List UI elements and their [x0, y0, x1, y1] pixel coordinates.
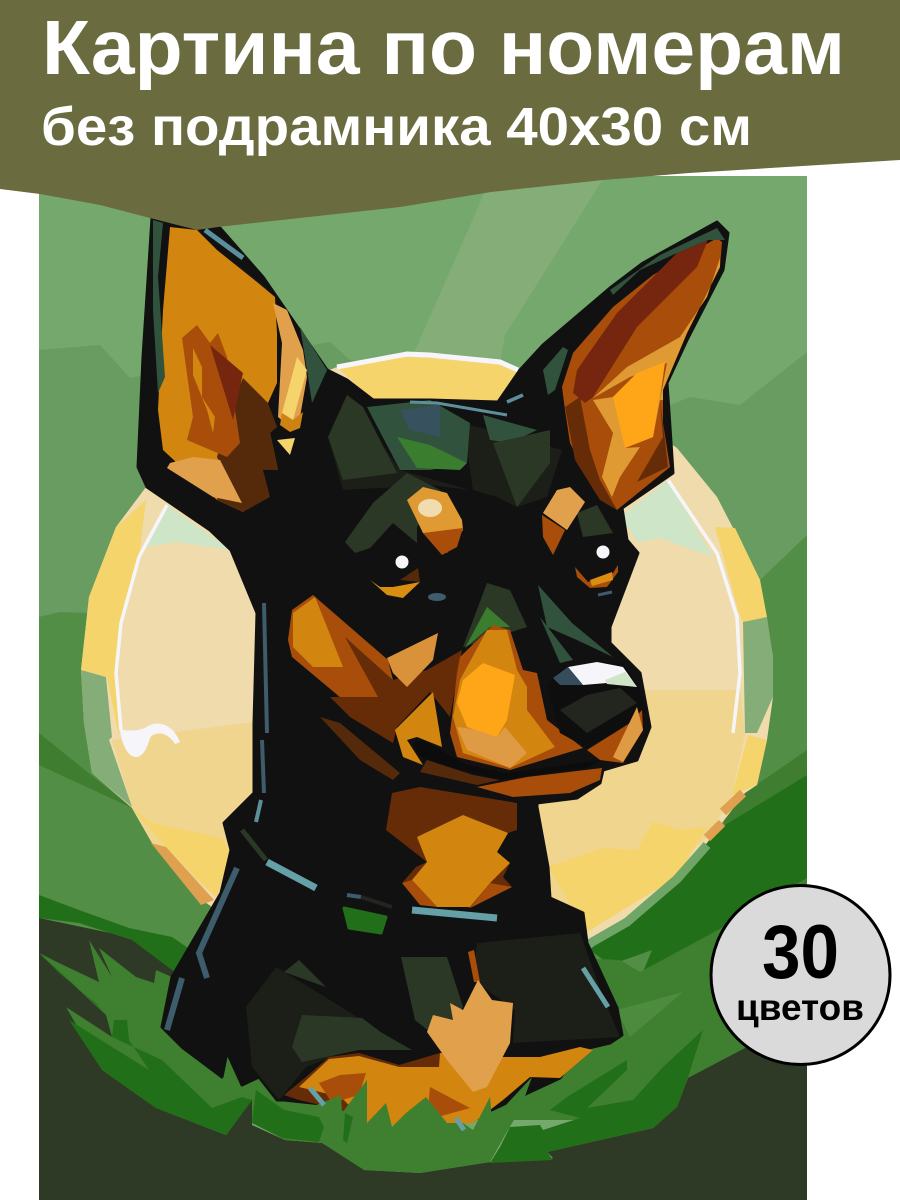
ground pocket upper left — [39, 918, 191, 985]
disc: right yellow ring — [715, 527, 767, 622]
disc: yellow top arc — [337, 357, 518, 402]
dog: collar — [242, 830, 497, 933]
light grass — [39, 878, 807, 1120]
disc: white hook blob — [120, 724, 180, 757]
badge: 30 colours: 30 — [762, 910, 839, 995]
title: Картина по номерам — [42, 5, 845, 91]
foreground: grass and dark ground — [39, 878, 807, 1200]
bottom ground — [39, 953, 807, 1200]
disc: right pale green block — [743, 617, 773, 733]
dog: nose — [547, 662, 647, 763]
header banner — [0, 0, 900, 230]
dark grass right — [490, 1030, 703, 1163]
dog: silhouette — [138, 218, 728, 1120]
subtitle: без подрамника 40х30 см — [41, 97, 752, 157]
disc: white ring top — [337, 354, 518, 370]
dark band upper left — [39, 895, 191, 973]
dog: chest leaf — [427, 950, 513, 1092]
dog: eyebrows — [407, 487, 585, 555]
dog: shoulder lines — [167, 868, 237, 1030]
dog: chest patch on neck — [386, 787, 517, 908]
disc: lower warm band — [112, 690, 745, 932]
disc: right yellow block — [732, 735, 767, 795]
disc: left yellow ring — [81, 500, 146, 737]
disc: lower left yellow — [132, 808, 231, 897]
dog: chest shading — [246, 933, 620, 1100]
dog: right eye — [575, 546, 618, 595]
disc: left pale green block — [81, 670, 132, 807]
disc: mint left — [146, 505, 231, 550]
dark grass streak — [39, 953, 102, 1010]
dog: chest orange — [284, 1047, 593, 1127]
grass over chest — [252, 1077, 532, 1173]
painting: green background — [39, 176, 807, 1200]
dog: mouth and lip — [413, 740, 602, 797]
disc: orange spots — [707, 793, 743, 838]
sun disc — [81, 353, 773, 960]
disc: green rim — [587, 845, 707, 945]
dog illustration — [138, 218, 728, 1173]
disc: white ring right — [668, 480, 740, 733]
dog: cheek — [288, 595, 462, 780]
disc: mint right — [620, 480, 713, 557]
disc: white ring left — [116, 505, 167, 730]
dog: forehead shading — [328, 395, 613, 553]
dog: nose bridge — [463, 583, 613, 663]
dog: muzzle — [450, 625, 583, 770]
dog: left eye — [370, 556, 446, 601]
light grass patch right — [617, 992, 683, 1037]
badge: 30 colours: цветов — [736, 987, 864, 1028]
dark grass left — [69, 1020, 252, 1135]
dog: right ear — [507, 228, 725, 510]
dog: neck lines — [256, 603, 267, 822]
dog: left ear — [153, 220, 327, 512]
disc: lower right yellow — [548, 822, 707, 932]
badge: 30 colours — [711, 886, 890, 1064]
disc: lower left orange — [151, 843, 214, 905]
